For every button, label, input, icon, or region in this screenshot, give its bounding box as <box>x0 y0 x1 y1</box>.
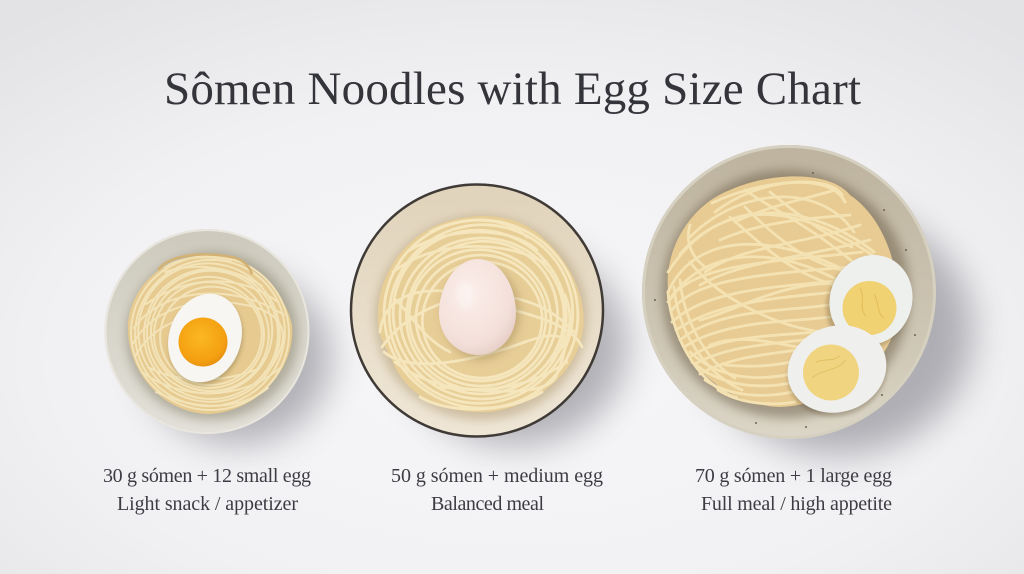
bowl: medium portion <box>351 184 627 445</box>
noodles <box>119 243 301 423</box>
boiled egg half: lower <box>776 313 898 429</box>
bowl shadow <box>703 210 973 454</box>
boiled egg half: upper <box>814 243 925 361</box>
bowl: large portion <box>642 145 973 454</box>
bowl speckles <box>654 172 916 428</box>
bowl body <box>642 145 936 439</box>
bowl shadow <box>403 245 627 445</box>
egg half with runny yolk <box>157 284 254 395</box>
noodles <box>366 201 596 427</box>
caption: large portion <box>695 465 892 515</box>
bowl: small portion <box>104 229 330 443</box>
caption: large portion: Full meal / high appetite <box>701 493 892 515</box>
caption: small portion: Light snack / appetizer <box>117 493 298 515</box>
caption: small portion <box>103 465 311 515</box>
whole egg <box>439 259 519 359</box>
noodles <box>668 176 898 407</box>
caption: large portion: 70 g sómen + 1 large egg <box>695 465 892 487</box>
bowl shadow <box>146 273 330 443</box>
bowl body <box>351 184 603 436</box>
caption: medium portion: 50 g sómen + medium egg <box>391 465 603 487</box>
title: Sômen Noodles with Egg Size Chart <box>164 63 861 115</box>
caption: small portion: 30 g sómen + 12 small egg <box>103 465 311 487</box>
caption: medium portion <box>391 465 603 515</box>
caption: medium portion: Balanced meal <box>431 493 544 515</box>
bowl body <box>104 229 310 434</box>
